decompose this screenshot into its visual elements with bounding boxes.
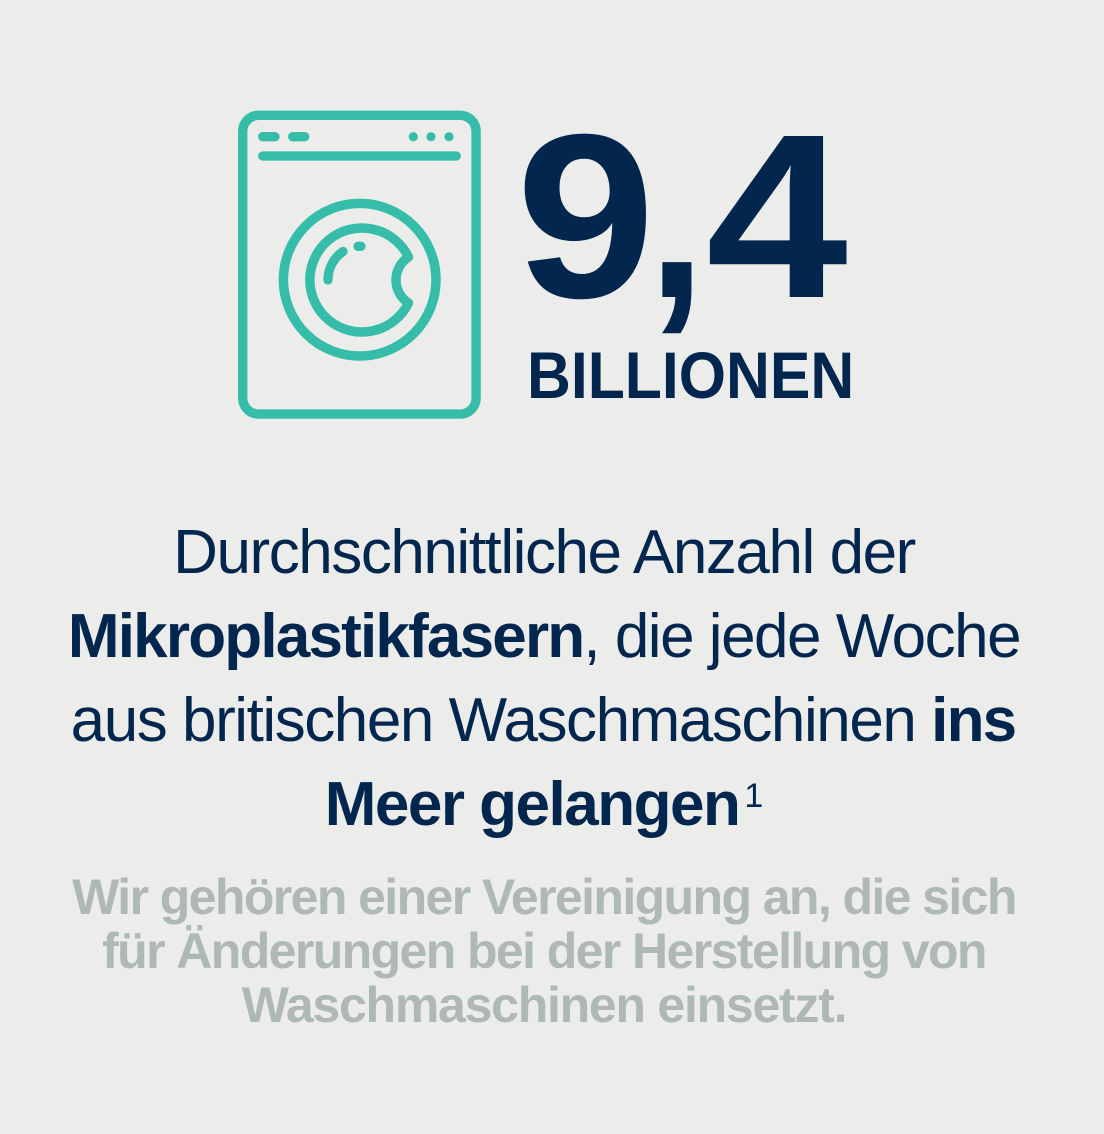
big number: 9 [516,85,655,347]
supporting note [72,869,1016,1033]
supporting note: Wir gehören einer Vereinigung an, die sich [72,869,1016,925]
main statement: Meer gelangen1 [325,770,763,839]
unit label: BILLIONEN [526,338,854,412]
big number: 4 [706,85,848,347]
supporting note: Waschmaschinen einsetzt. [242,977,846,1033]
main statement: aus britischen Waschmaschinen ins [71,686,1015,755]
main statement [68,518,1020,839]
main statement: Mikroplastikfasern, die jede Woche [68,602,1020,671]
supporting note: für Änderungen bei der Herstellung von [102,923,986,979]
icon: washing machine [238,110,481,419]
big number: , [648,85,705,347]
main statement: Durchschnittliche Anzahl der [173,518,915,587]
big number [516,85,848,347]
